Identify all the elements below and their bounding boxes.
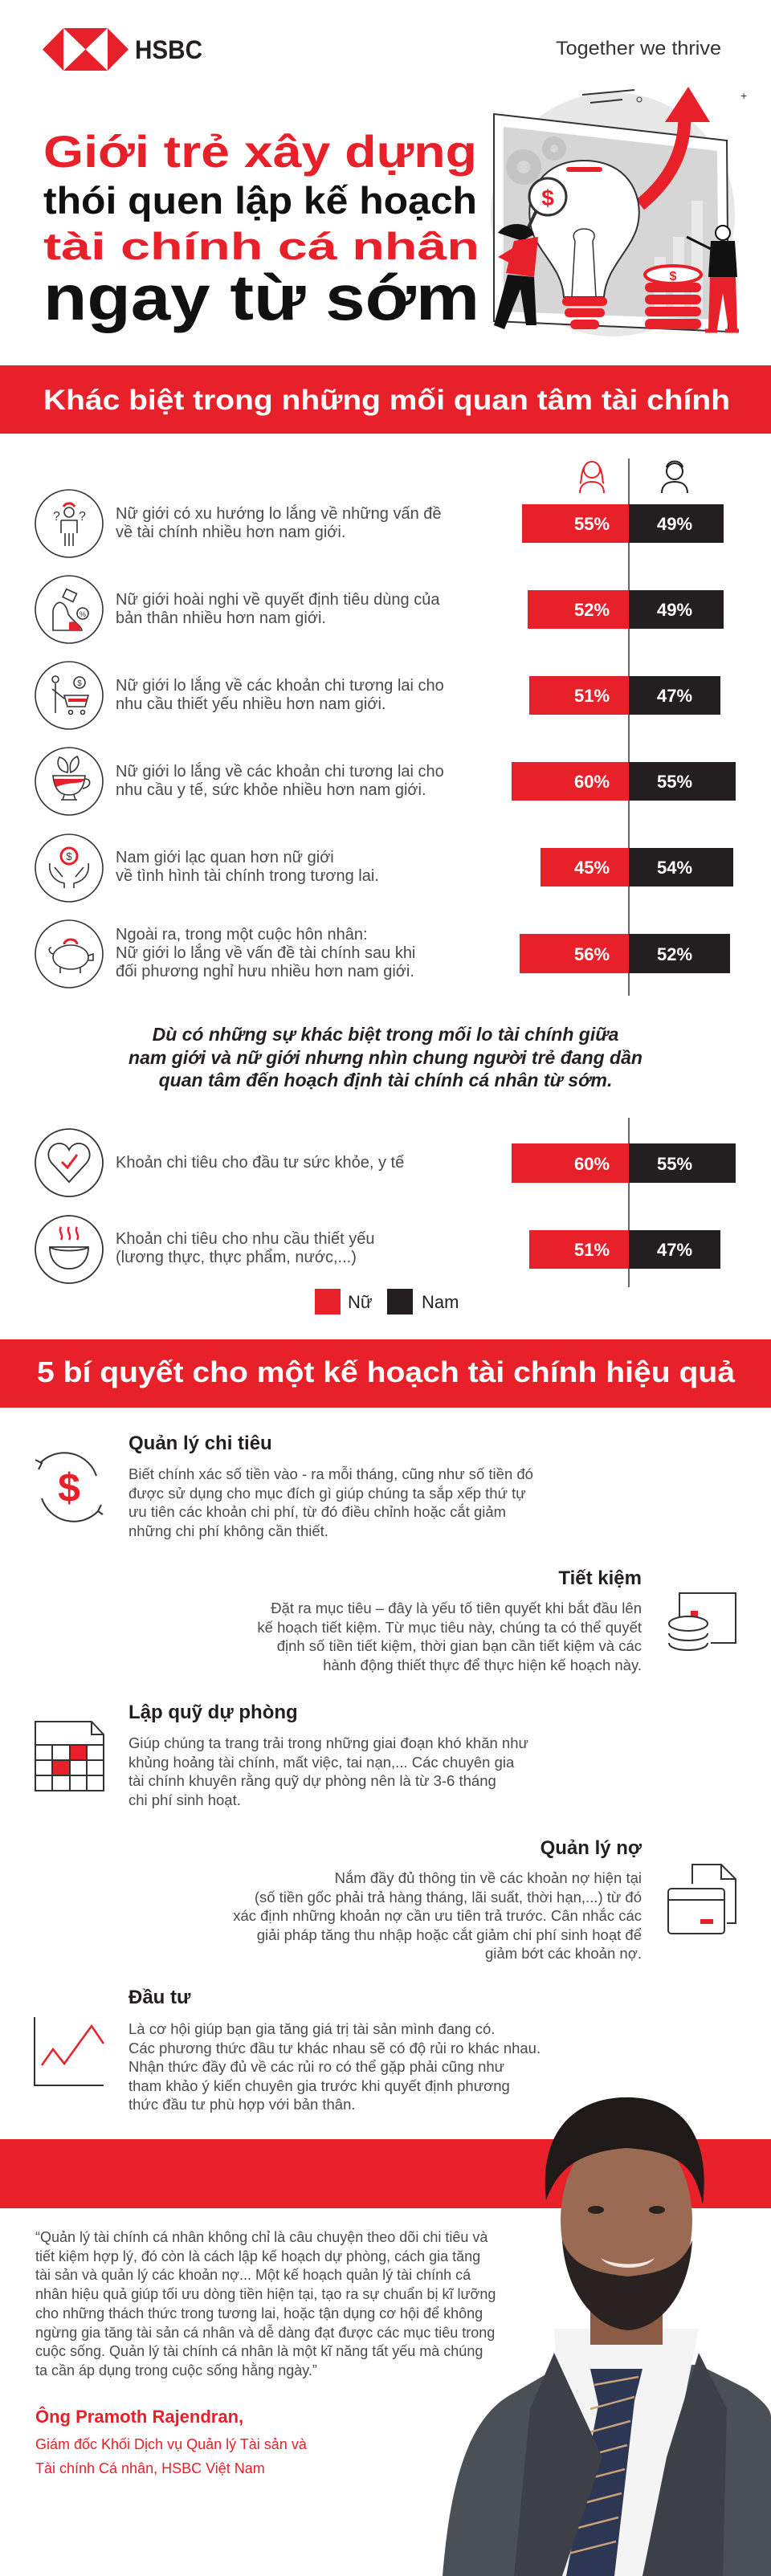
tip 1 body: được sử dụng cho mục đích gì giúp chúng ta sắp xếp thứ tự [128, 1484, 526, 1502]
quote red band [0, 2139, 771, 2208]
tip 3 body [128, 1734, 528, 1808]
bar row 4: 60% [574, 772, 610, 792]
bar row 2 [528, 590, 724, 629]
essentials text: Khoản chi tiêu cho nhu cầu thiết yếu [116, 1230, 374, 1248]
icon: worried person: ? [79, 510, 86, 524]
tip 2 body: hành động thiết thực để thực hiện kế hoạch này. [323, 1656, 642, 1673]
icon: worried person: ? [53, 510, 60, 524]
tip 1 body: Biết chính xác số tiền vào - ra mỗi tháng, cũng như số tiền đó [128, 1465, 533, 1482]
row 2 text: bản thân nhiều hơn nam giới. [116, 609, 326, 627]
quote text: ta cần áp dụng trong cuộc sống hằng ngày.” [35, 2362, 317, 2378]
tip 2 body: Đặt ra mục tiêu – đây là yếu tố tiên quyết khi bắt đầu lên [271, 1600, 642, 1616]
icon: heart check [35, 1129, 103, 1196]
bar health [512, 1143, 736, 1183]
quote text: tiết kiệm hợp lý, đó còn là cách lập kế hoạch dự phòng, cách gia tăng [35, 2248, 480, 2264]
quote text: “Quản lý tài chính cá nhân không chỉ là câu chuyện theo dõi chi tiêu và [35, 2229, 487, 2245]
speaker title: Tài chính Cá nhân, HSBC Việt Nam [35, 2460, 265, 2476]
icon: calendar [35, 1722, 104, 1791]
bar row 4: 55% [657, 772, 692, 792]
bar row 5: 45% [574, 858, 610, 878]
bar essentials: 51% [574, 1240, 610, 1260]
row 3 text: Nữ giới lo lắng về các khoản chi tương lai cho [116, 677, 444, 695]
icon: tea cup with leaves [35, 748, 103, 815]
row 2 text [116, 591, 440, 627]
tip 3 body: khủng hoảng tài chính, mất việc, tai nạn,... Các chuyên gia [128, 1754, 514, 1770]
tip 5 body: Các phương thức đầu tư khác nhau sẽ có độ rủi ro khác nhau. [128, 2040, 541, 2056]
bar health: 55% [657, 1154, 692, 1174]
row 3 text [116, 676, 444, 713]
tip 4 body: xác định những khoản nợ cần ưu tiên trả trước. Cân nhắc các [233, 1907, 642, 1924]
tip 4 body: Nắm đầy đủ thông tin về các khoản nợ hiện tại [335, 1869, 642, 1886]
icon: dollar cycle [35, 1453, 103, 1522]
title: tài chính cá nhân [43, 225, 479, 267]
icon: female [580, 462, 604, 493]
tip 3 body: Giúp chúng ta trang trải trong những giai đoạn khó khăn như [128, 1734, 528, 1751]
quote text [35, 2229, 496, 2378]
bar row 6: 56% [574, 944, 610, 964]
legend [315, 1289, 459, 1314]
tip 4 body: giải pháp tăng thu nhập hoặc cắt giảm chi phí sinh hoạt để [257, 1926, 642, 1943]
statement [128, 1024, 642, 1090]
bar row 3: 47% [657, 686, 692, 706]
quote text: cho những thách thức trong tương lai, hoặc tận dụng cơ hội để không [35, 2305, 483, 2321]
row 1 text [116, 504, 442, 541]
row 6 text: Ngoài ra, trong một cuộc hôn nhân: [116, 926, 368, 944]
icon: male [662, 461, 687, 493]
tip 5 body: tham khảo ý kiến chuyên gia trước khi quyết định phương [128, 2077, 510, 2094]
tip 4 body: (số tiền gốc phải trả hàng tháng, lãi suất, thời hạn,...) từ đó [255, 1889, 642, 1905]
bar row 6: 52% [657, 944, 692, 964]
quote text: cuộc sống. Quản lý tài chính cá nhân là một kĩ năng tất yếu mà chúng [35, 2343, 483, 2359]
bar row 2: 52% [574, 600, 610, 620]
speaker title [35, 2436, 307, 2476]
speaker name: Ông Pramoth Rajendran, [35, 2407, 243, 2427]
tip 5 body: Nhận thức đầy đủ về các rủi ro có thể gặp phải cũng như [128, 2058, 504, 2075]
photo: speaker portrait [443, 2097, 771, 2576]
tip 2 heading: Tiết kiệm [558, 1567, 642, 1589]
tip 2 body: định số tiền tiết kiệm, thời gian bạn cần tiết kiệm và các [277, 1637, 642, 1654]
bar row 5 [541, 848, 733, 887]
tip 1 body: ưu tiên các khoản chi phí, từ đó điều chỉnh hoặc cắt giảm [128, 1503, 506, 1520]
icon: debt document and card [668, 1865, 736, 1934]
legend: Nữ [348, 1292, 373, 1312]
logo: HSBC hexagon [43, 28, 128, 71]
statement: Dù có những sự khác biệt trong mối lo tài chính giữa [153, 1024, 618, 1045]
statement: nam giới và nữ giới nhưng nhìn chung người trẻ đang dần [128, 1047, 642, 1068]
health text: Khoản chi tiêu cho đầu tư sức khỏe, y tế [116, 1154, 404, 1172]
row 2 text: Nữ giới hoài nghi về quyết định tiêu dùng của [116, 591, 439, 609]
tip 2 body [257, 1600, 642, 1673]
icon: hands holding coin: $ [66, 850, 72, 862]
row 5 text: Nam giới lạc quan hơn nữ giới [116, 849, 334, 866]
row 4 text [116, 762, 444, 799]
quote text: nhân hiệu quả giúp tối ưu dòng tiền hiện tại, tạo ra sự chuẩn bị kĩ lưỡng [35, 2286, 496, 2302]
row 1 text: Nữ giới có xu hướng lo lắng về những vấn đề [116, 505, 442, 523]
icon: dollar cycle: $ [58, 1465, 80, 1510]
bar row 1: 49% [657, 514, 692, 534]
row 4 text: Nữ giới lo lắng về các khoản chi tương lai cho [116, 763, 444, 781]
title: Giới trẻ xây dựng [43, 126, 477, 177]
tip 1 heading: Quản lý chi tiêu [128, 1433, 272, 1454]
tip 4 body: giảm bớt các khoản nợ. [485, 1945, 642, 1962]
bar health: 60% [574, 1154, 610, 1174]
tip 3 body: tài chính khuyên rằng quỹ dự phòng nên là từ 3-6 tháng [128, 1772, 496, 1789]
bar row 5: 54% [657, 858, 692, 878]
bar row 1 [522, 504, 724, 543]
tip 5 body: Là cơ hội giúp bạn gia tăng giá trị tài sản mình đang có. [128, 2020, 495, 2037]
icon: high heel shopping [35, 576, 103, 643]
row 1 text: về tài chính nhiều hơn nam giới. [116, 524, 345, 541]
tip 5 body: thức đầu tư phù hợp với bản thân. [128, 2096, 356, 2113]
chart: gender concerns [35, 459, 736, 1314]
illustration: bulb, monitor, people, coins: + [740, 89, 747, 102]
essentials text: (lương thực, thực phẩm, nước,...) [116, 1249, 357, 1266]
row 6 text [116, 926, 415, 980]
tip 1 body: những chi phí không cần thiết. [128, 1522, 328, 1539]
icon: shopping cart: $ [77, 679, 82, 688]
icon: hands holding coin [35, 834, 103, 902]
tip 5 heading: Đầu tư [128, 1987, 190, 2008]
title [43, 126, 479, 333]
statement: quan tâm đến hoạch định tài chính cá nhân từ sớm. [159, 1070, 612, 1090]
banner: section 1 heading [0, 365, 771, 434]
tip 2 body: kế hoạch tiết kiệm. Từ mục tiêu này, chúng ta có thể quyết [257, 1619, 642, 1635]
icon: worried person [35, 490, 103, 557]
logo text: HSBC [135, 35, 202, 64]
quote text: ngừng gia tăng tài sản cá nhân và dễ dàng đạt được các mục tiêu trong [35, 2325, 495, 2341]
bar row 4 [512, 762, 736, 801]
row 6 text: đối phương nghỉ hưu nhiều hơn nam giới. [116, 963, 414, 980]
bar essentials: 47% [657, 1240, 692, 1260]
row 4 text: nhu cầu y tế, sức khỏe nhiều hơn nam giới. [116, 781, 426, 799]
speaker title: Giám đốc Khối Dịch vụ Quản lý Tài sản và [35, 2436, 307, 2452]
section 2 icons [34, 1452, 736, 2086]
row 3 text: nhu cầu thiết yếu nhiều hơn nam giới. [116, 695, 386, 713]
row 6 text: Nữ giới lo lắng về vấn đề tài chính sau khi [116, 944, 415, 962]
banner: section 2 heading: 5 bí quyết cho một kế hoạch tài chính hiệu quả [37, 1355, 736, 1388]
tip 1 body [128, 1465, 533, 1539]
illustration: bulb, monitor, people, coins: $ [670, 270, 677, 283]
tip 3 heading: Lập quỹ dự phòng [128, 1702, 298, 1723]
illustration: bulb, monitor, people, coins [491, 87, 747, 336]
icon: investment chart [35, 2017, 104, 2085]
legend: Nam [422, 1292, 459, 1312]
tip 4 heading: Quản lý nợ [541, 1837, 642, 1859]
bar row 1: 55% [574, 514, 610, 534]
bar row 3 [529, 676, 720, 715]
icon: shopping cart [35, 662, 103, 729]
quote text: tài sản và quản lý các khoản nợ... Một kế hoạch quản lý tài chính cá [35, 2267, 471, 2283]
bar row 3: 51% [574, 686, 610, 706]
tip 5 body [128, 2020, 541, 2113]
row 5 text [116, 849, 379, 885]
banner: section 2 heading [0, 1339, 771, 1408]
tagline: Together we thrive [556, 38, 721, 59]
bar essentials [529, 1230, 720, 1269]
icon: piggy bank [35, 920, 103, 988]
bar row 2: 49% [657, 600, 692, 620]
header illustration and title [43, 28, 747, 336]
banner: section 1 heading: Khác biệt trong những mối quan tâm tài chính [43, 385, 730, 416]
row 5 text: về tình hình tài chính trong tương lai. [116, 867, 379, 885]
bar row 6 [520, 934, 730, 973]
illustration: bulb, monitor, people, coins: $ [541, 185, 554, 210]
tip 3 body: chi phí sinh hoạt. [128, 1791, 241, 1808]
tip 4 body [233, 1869, 642, 1962]
icon: high heel shopping: % [80, 610, 86, 618]
title: thói quen lập kế hoạch [43, 179, 477, 222]
icon: bowl with steam [35, 1216, 103, 1283]
essentials text [116, 1230, 374, 1266]
icon: savings coins [669, 1593, 736, 1650]
title: ngay từ sớm [43, 262, 479, 333]
